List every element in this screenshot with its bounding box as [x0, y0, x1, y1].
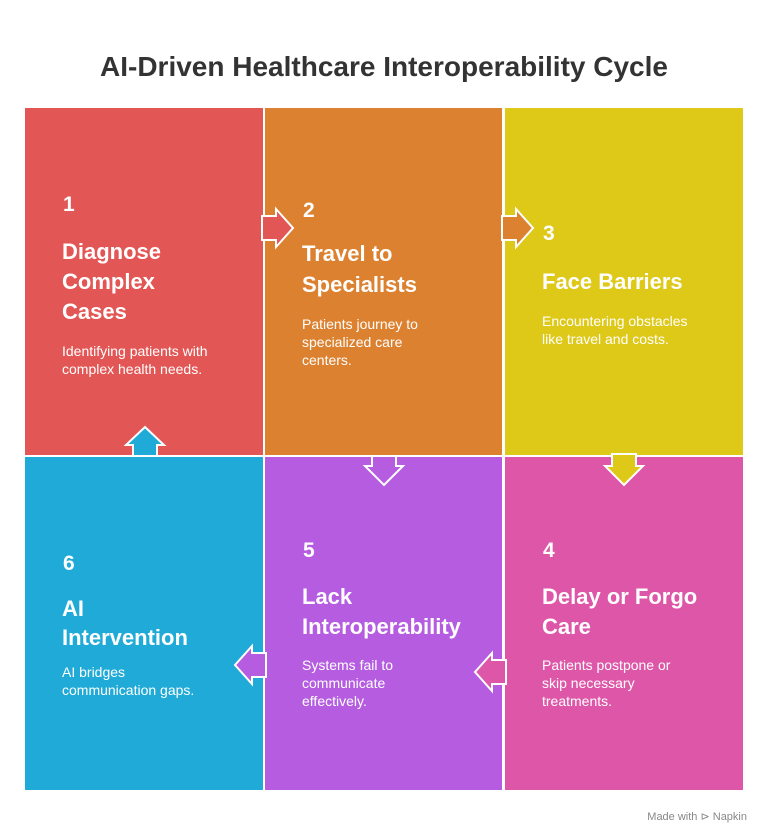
- title: AI-Driven Healthcare Interoperability Cycle: [100, 51, 668, 82]
- arrow: 6 to 1: [126, 427, 164, 456]
- arrow: 2 to 5: [365, 456, 403, 485]
- panel 6: AI intervention: AI: [62, 596, 84, 621]
- panel 4: delay care: Delay or Forgo: [542, 584, 697, 609]
- arrow: 2 to 3: [502, 209, 533, 247]
- panel 1: diagnose: Cases: [62, 299, 127, 324]
- footer credit: Made with ⊳ Napkin: [647, 811, 747, 823]
- panel 2: travel: specialized care: [302, 334, 403, 350]
- panel 1: diagnose: [25, 108, 263, 455]
- panel 6: AI intervention: AI bridges: [62, 664, 125, 680]
- panel 2: travel: Specialists: [302, 272, 417, 297]
- panel 3: barriers: Face Barriers: [542, 269, 683, 294]
- panel 4: delay care: Care: [542, 614, 591, 639]
- panel 1: diagnose: Complex: [62, 269, 156, 294]
- panel 5: lack interoperability: communicate: [302, 675, 385, 691]
- panel 3: barriers: like travel and costs.: [542, 331, 669, 347]
- panel 4: delay care: treatments.: [542, 693, 612, 709]
- panel 5: lack interoperability: Lack: [302, 584, 353, 609]
- panel 1: diagnose: 1: [63, 193, 75, 216]
- panel 2: travel: 2: [303, 199, 315, 222]
- panel 5: lack interoperability: Systems fail to: [302, 657, 393, 673]
- panel 4: delay care: Patients postpone or: [542, 657, 671, 673]
- arrow: 3 to 4: [605, 454, 643, 485]
- arrow: 5 to 6: [235, 646, 266, 684]
- panel 1: diagnose: Diagnose: [62, 239, 161, 264]
- panel 6: AI intervention: Intervention: [62, 625, 188, 650]
- panel 4: delay care: [505, 457, 743, 790]
- panel 5: lack interoperability: Interoperability: [302, 614, 462, 639]
- panel 4: delay care: skip necessary: [542, 675, 635, 691]
- panel 3: barriers: 3: [543, 222, 555, 245]
- arrow: 1 to 2: [262, 209, 293, 247]
- panel 5: lack interoperability: [265, 457, 502, 790]
- panel 5: lack interoperability: effectively.: [302, 693, 367, 709]
- panel 2: travel: [265, 108, 502, 455]
- panel 2: travel: centers.: [302, 352, 352, 368]
- panel 4: delay care: 4: [543, 539, 555, 562]
- panel 3: barriers: Encountering obstacles: [542, 313, 688, 329]
- panel 5: lack interoperability: 5: [303, 539, 315, 562]
- panel 6: AI intervention: [25, 457, 263, 790]
- panel 3: barriers: [505, 108, 743, 455]
- arrow: 4 to 5: [475, 653, 506, 691]
- panel 6: AI intervention: communication gaps.: [62, 682, 194, 698]
- panel 2: travel: Patients journey to: [302, 316, 418, 332]
- panel 1: diagnose: complex health needs.: [62, 361, 202, 377]
- panel 2: travel: Travel to: [302, 241, 392, 266]
- panel 6: AI intervention: 6: [63, 552, 75, 575]
- panel 1: diagnose: Identifying patients with: [62, 343, 208, 359]
